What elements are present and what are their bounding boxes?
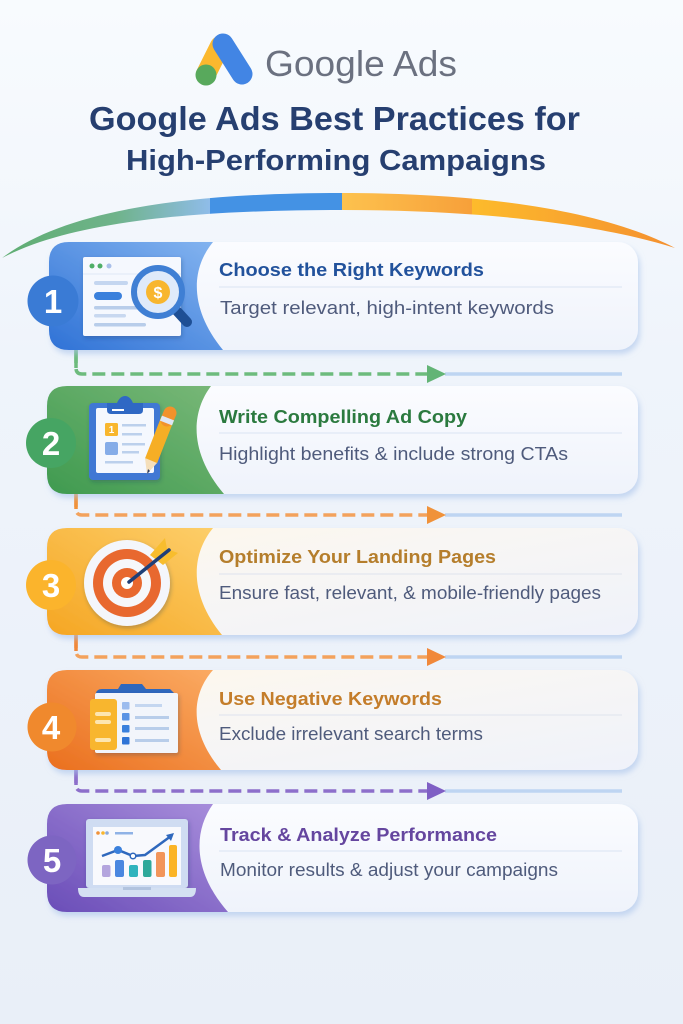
number badge 5: 5 — [43, 842, 61, 879]
icon: laptop with chart — [78, 819, 196, 897]
description: step 1: Target relevant, high-intent keywords — [220, 298, 554, 318]
connector 2 — [76, 494, 622, 524]
card background — [49, 242, 638, 350]
icon: target with arrow — [84, 538, 178, 626]
connector 3 — [76, 635, 622, 666]
title — [89, 100, 580, 177]
description: step 5: Monitor results & adjust your campaigns — [220, 860, 558, 880]
number badge 5 — [28, 836, 76, 884]
card background — [47, 528, 638, 635]
number badge 2 — [26, 418, 76, 468]
heading: step 4: Use Negative Keywords — [219, 688, 442, 709]
icon: browser with magnifier: $ — [154, 285, 163, 302]
panel: step 2 — [26, 386, 638, 494]
title: Google Ads Best Practices for — [89, 100, 580, 137]
card background — [47, 804, 638, 912]
number badge 2: 2 — [42, 425, 60, 462]
description: step 2: Highlight benefits & include strong CTAs — [219, 444, 568, 464]
card background — [47, 670, 638, 770]
number badge 1: 1 — [44, 283, 62, 320]
number badge 1 — [28, 276, 78, 326]
panel: step 1 — [28, 242, 638, 350]
heading: step 2: Write Compelling Ad Copy — [219, 406, 468, 427]
icon: Google Ads mark — [196, 44, 242, 86]
heading: step 1: Choose the Right Keywords — [219, 259, 484, 280]
description: step 4: Exclude irrelevant search terms — [219, 724, 483, 744]
heading: step 5: Track & Analyze Performance — [220, 824, 497, 845]
decorative colored arc — [2, 193, 675, 258]
panel: step 4 — [28, 670, 638, 770]
panel: step 5 — [28, 804, 638, 912]
icon: folder with list — [90, 684, 178, 753]
logo: Google Ads — [196, 43, 457, 86]
number badge 3 — [26, 560, 76, 610]
number badge 4: 4 — [42, 709, 61, 746]
heading: step 3: Optimize Your Landing Pages — [219, 546, 496, 567]
number badge 3: 3 — [42, 567, 60, 604]
panel: step 3 — [26, 528, 638, 635]
logo wordmark: Google Ads — [265, 43, 457, 84]
title: High-Performing Campaigns — [126, 145, 546, 177]
card background — [47, 386, 638, 494]
icon: clipboard with pencil: 1 — [109, 425, 115, 436]
icon: browser with magnifier — [83, 257, 187, 336]
connector 1 — [76, 350, 622, 383]
connector 4 — [76, 770, 622, 800]
number badge 4 — [28, 702, 76, 752]
icon: clipboard with pencil — [89, 396, 170, 480]
description: step 3: Ensure fast, relevant, & mobile-friendly pages — [219, 583, 601, 603]
